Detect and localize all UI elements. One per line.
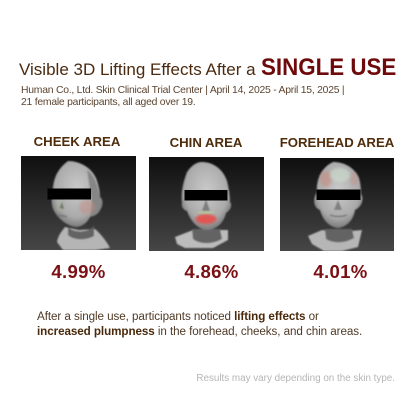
heading: chin area: CHIN AREA — [170, 135, 242, 150]
heading: forehead area: FOREHEAD AREA — [280, 135, 394, 150]
figure: forehead 4.01%: 4.01% — [313, 261, 368, 282]
disclaimer: Results may vary depending on the skin type. — [196, 373, 395, 384]
image: chin scan — [149, 157, 264, 251]
heading: cheek area: CHEEK AREA — [34, 134, 120, 149]
study details: 21 female participants, all aged over 19. — [21, 97, 195, 108]
image: cheek scan — [21, 156, 136, 250]
figure: chin 4.86%: 4.86% — [184, 261, 239, 282]
summary text: increased plumpness in the forehead, cheeks, and chin areas. — [37, 325, 362, 338]
eye bar — [316, 190, 360, 200]
title: SINGLE USE — [261, 54, 397, 81]
title: Visible 3D Lifting Effects After a — [19, 60, 256, 79]
study details — [21, 85, 344, 108]
eye bar — [184, 190, 228, 200]
summary text — [37, 310, 362, 338]
figure: cheek 4.99%: 4.99% — [51, 261, 106, 282]
eye bar — [48, 188, 91, 200]
study details: Human Co., Ltd. Skin Clinical Trial Center | April 14, 2025 - April 15, 2025 | — [21, 85, 344, 96]
title — [19, 54, 397, 81]
image: forehead scan — [280, 158, 394, 251]
summary text: After a single use, participants noticed lifting effects or — [37, 310, 319, 323]
